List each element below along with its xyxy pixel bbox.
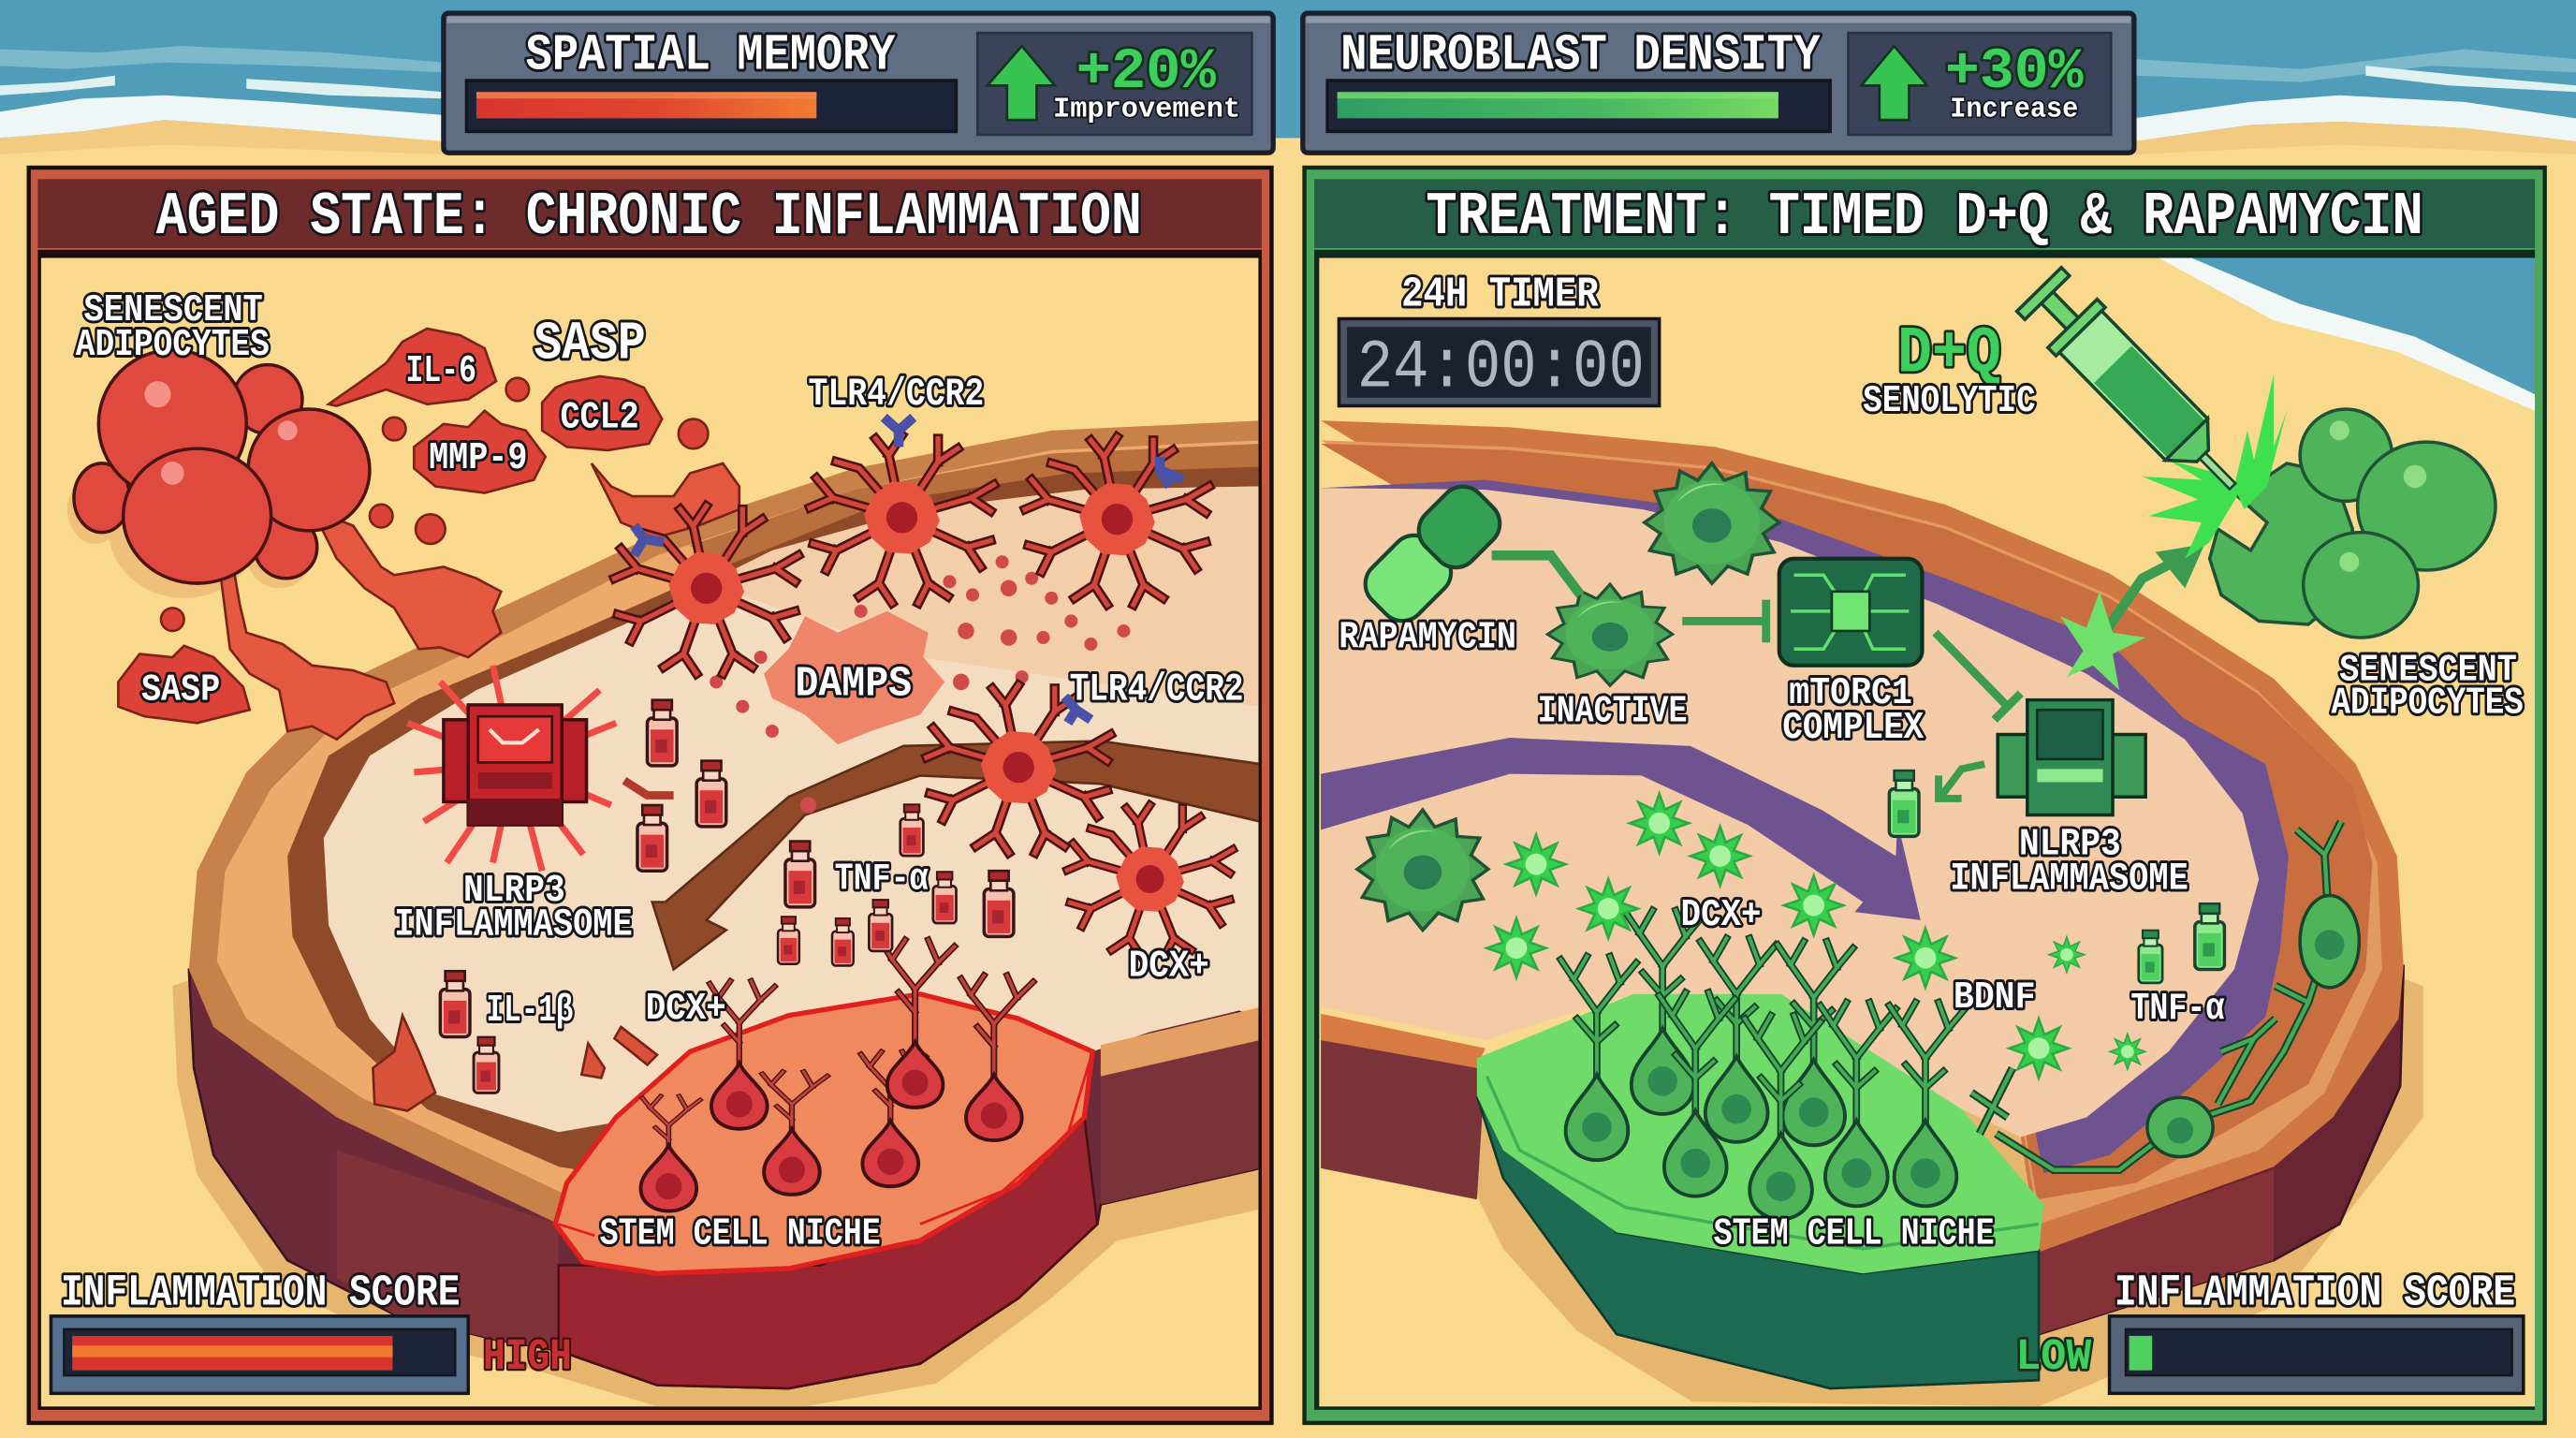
progress bar: neuroblast density	[1327, 81, 1830, 131]
inflammation score: low	[2016, 1269, 2524, 1393]
NLRP3 inflammasome machine: treated	[1998, 700, 2145, 815]
neurons: aged niche	[640, 940, 1033, 1211]
labels: treatment scene: STEM CELL NICHE	[1714, 1213, 1995, 1256]
migrating neurons on ring	[1971, 822, 2359, 1170]
labels: treatment scene: COMPLEX	[1782, 707, 1925, 750]
icon: mTORC1 chip	[1779, 559, 1922, 666]
labels: aged scene: SASP	[534, 315, 646, 375]
adipocytes: cleared treated	[2210, 409, 2496, 638]
receptors: TLR4 CCR2	[634, 418, 1183, 723]
labels: treatment scene	[1339, 318, 2524, 1256]
adipocytes: senescent aged	[74, 350, 370, 583]
labels: treatment scene: mTORC1	[1789, 672, 1912, 715]
inhibit line: microglia to mTORC1	[1682, 600, 1766, 642]
DAMPs blob	[764, 611, 944, 744]
labels: aged scene	[76, 289, 1244, 1256]
stat title: spatial memory: SPATIAL MEMORY	[526, 28, 896, 85]
cytokine plumes	[218, 463, 739, 740]
labels: aged scene: MMP-9	[429, 437, 527, 480]
labels: aged scene: TNF-α	[835, 858, 929, 902]
heading: aged state: AGED STATE: CHRONIC INFLAMMATION	[156, 183, 1142, 252]
arrow: senolytic clearance	[2060, 544, 2204, 690]
labels: treatment scene: NLRP3	[2019, 824, 2121, 867]
icon: rapamycin pill	[1363, 485, 1501, 624]
icon: up arrow	[988, 46, 1055, 120]
labels: treatment scene: INFLAMMASOME	[1950, 857, 2188, 902]
icon: up arrow	[1862, 46, 1927, 120]
inflammation score: high: HIGH	[483, 1333, 572, 1383]
stat title: neuroblast density: NEUROBLAST DENSITY	[1340, 28, 1821, 85]
purple arrow	[1321, 738, 1921, 920]
labels: treatment scene: ADIPOCYTES	[2331, 682, 2524, 726]
progress bar: spatial memory	[466, 81, 956, 131]
scene: treated brain platform	[1321, 258, 2535, 1406]
labels: aged scene: SASP	[141, 669, 220, 712]
panel: treatment	[1305, 168, 2545, 1423]
labels: treatment scene: D+Q	[1897, 318, 2001, 392]
stem cell niche: treated	[1477, 994, 2043, 1388]
inhibit line: mTORC1 to NLRP3	[1936, 633, 2021, 720]
labels: aged scene: CCL2	[560, 396, 639, 439]
labels: treatment scene: SENESCENT	[2339, 650, 2517, 693]
arrow: rapamycin to microglia	[1492, 555, 1580, 594]
labels: aged scene: IL-6	[406, 350, 476, 393]
heading: treatment: TREATMENT: TIMED D+Q & RAPAMYCIN	[1426, 183, 2423, 252]
timer: 24H TIMER	[1401, 270, 1599, 318]
stat box: spatial memory improvement	[977, 33, 1251, 135]
icon: D+Q syringe	[2014, 265, 2237, 491]
vials: cytokines aged	[440, 700, 1014, 1093]
labels: treatment scene: DCX+	[1680, 894, 1761, 937]
reaction arrow: aged	[624, 781, 674, 795]
labels: aged scene: DCX+	[1129, 946, 1209, 989]
inflammation score: high	[51, 1269, 572, 1393]
stat box: neuroblast increase	[1848, 33, 2111, 135]
panel: aged state	[29, 168, 1271, 1423]
adipocyte shadow	[67, 489, 308, 598]
labels: aged scene: INFLAMMASOME	[394, 902, 633, 947]
labels: aged scene: STEM CELL NICHE	[600, 1213, 881, 1256]
background: shore foam and wet sand	[0, 46, 2576, 154]
impact burst	[2143, 374, 2287, 559]
brown arrow: aged	[652, 741, 1260, 970]
stat box: neuroblast increase: Increase	[1950, 94, 2078, 126]
labels: aged scene: ADIPOCYTES	[76, 324, 270, 367]
labels: aged scene: IL-1β	[487, 990, 574, 1033]
background: sea	[0, 0, 2576, 138]
labels: aged scene: NLRP3	[463, 870, 565, 913]
labels: aged scene: TLR4/CCR2	[1070, 668, 1244, 712]
labels: treatment scene: RAPAMYCIN	[1339, 617, 1516, 660]
DAMP particles	[710, 555, 1131, 814]
stat panel: neuroblast density	[1303, 13, 2134, 153]
neurons: treated niche	[1560, 910, 1965, 1219]
labels: treatment scene: TNF-α	[2130, 988, 2225, 1031]
inflammation score: high: INFLAMMATION SCORE	[61, 1269, 460, 1319]
labels: aged scene: SENESCENT	[84, 289, 263, 332]
stat box: spatial memory improvement: +20%	[1076, 40, 1216, 105]
stem cell niche: aged	[555, 994, 1097, 1388]
microglia: inactive	[1357, 463, 1779, 930]
labels: treatment scene: INACTIVE	[1538, 690, 1687, 733]
panel header bar: treatment	[1314, 179, 2535, 248]
labels: aged scene: TLR4/CCR2	[809, 372, 984, 417]
panel frame: aged	[29, 168, 1271, 1423]
labels: treatment scene: SENOLYTIC	[1863, 380, 2036, 423]
arrow: NLRP3 to vial	[1939, 764, 1984, 799]
labels: treatment scene: BDNF	[1954, 976, 2036, 1020]
panel header bar: aged	[37, 179, 1262, 248]
damaged neuron fragments	[373, 1016, 657, 1110]
inflammation score: low: LOW	[2016, 1333, 2092, 1383]
SASP blobs	[118, 329, 708, 723]
timer	[1339, 270, 1660, 407]
stat box: neuroblast increase: +30%	[1945, 40, 2084, 105]
labels: aged scene: DCX+	[646, 988, 726, 1031]
scene: aged brain platform	[67, 329, 1260, 1406]
panel frame: treatment	[1305, 168, 2545, 1423]
microglia: activated aged	[614, 435, 1233, 956]
sea corner	[2185, 258, 2535, 394]
BDNF stars	[1486, 794, 2145, 1078]
vials: cytokines treated	[1889, 770, 2224, 983]
labels: aged scene: DAMPS	[795, 659, 912, 708]
timer: 24:00:00	[1357, 330, 1645, 407]
NLRP3 inflammasome machine: aged	[407, 666, 616, 871]
stat box: spatial memory improvement: Improvement	[1053, 94, 1240, 126]
stat panel: spatial memory	[444, 13, 1273, 153]
